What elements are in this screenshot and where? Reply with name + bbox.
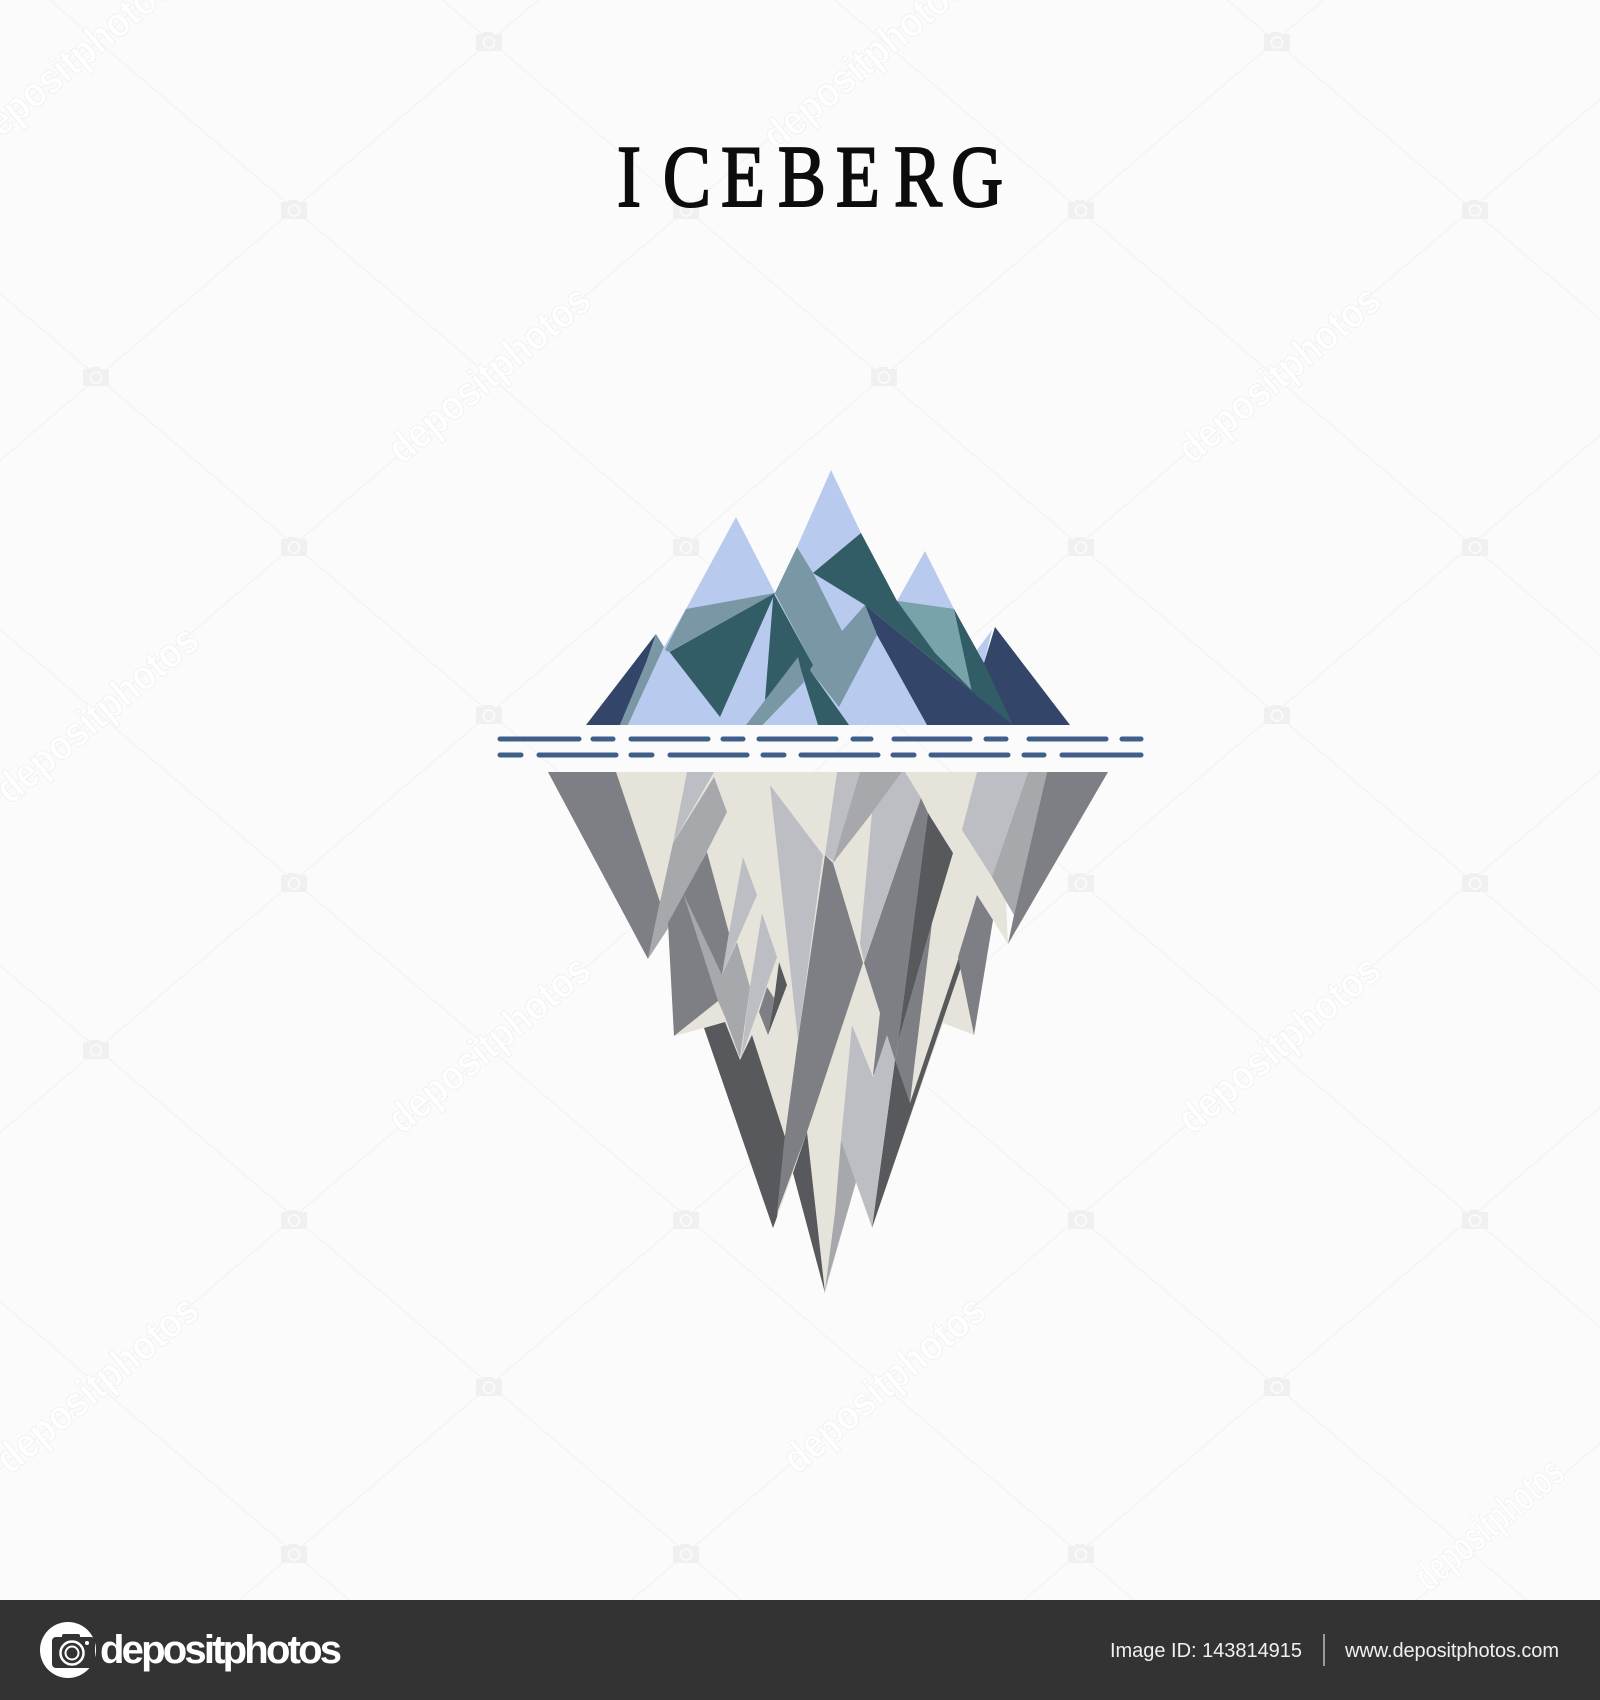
iceberg above water bbox=[586, 470, 1070, 725]
watermark text and camera marks: depositphotos bbox=[773, 1286, 995, 1482]
central dark teal face bbox=[765, 593, 849, 725]
watermark text and camera marks: depositphotos bbox=[1168, 946, 1390, 1142]
lower dark face bbox=[704, 1022, 787, 1228]
right mid grey face bbox=[992, 772, 1047, 915]
central dark grey face bbox=[777, 855, 863, 1213]
website url: www.depositphotos.com bbox=[1344, 1640, 1559, 1662]
right-centre grey strip bbox=[895, 923, 932, 1103]
right dark teal band bbox=[813, 533, 1013, 725]
water line dashes bbox=[500, 739, 1141, 755]
watermark text and camera marks: depositphotos bbox=[378, 946, 600, 1142]
cream ice body bbox=[616, 772, 1008, 1293]
right lower grey shard bbox=[958, 895, 993, 1035]
right light grey face bbox=[962, 772, 1028, 877]
small dark diamonds bbox=[759, 962, 787, 1035]
small light shards bbox=[722, 857, 777, 1058]
right lower dark strip bbox=[872, 957, 961, 1228]
icon: camera badge bbox=[40, 1622, 96, 1678]
left outer grey face bbox=[548, 772, 660, 959]
right-centre dark face bbox=[898, 813, 953, 1042]
footer separator bbox=[1323, 1634, 1325, 1666]
central lower grey-blue strip bbox=[746, 657, 804, 725]
right navy faces bbox=[865, 605, 1070, 725]
left inner dark grey face bbox=[668, 852, 729, 1036]
lower mid grey spike bbox=[825, 1140, 856, 1290]
left peak grey-blue face bbox=[665, 593, 775, 652]
right-centre grey face bbox=[864, 798, 928, 1075]
left mid grey shard bbox=[648, 777, 727, 959]
iceberg below water bbox=[548, 772, 1108, 1293]
light blue ice body bbox=[628, 470, 927, 725]
upper centre shards bbox=[825, 772, 921, 962]
central light grey shard bbox=[770, 785, 823, 1040]
central grey-blue ridge bbox=[775, 547, 877, 707]
depositphotos logo bbox=[40, 1622, 342, 1678]
right outer dark grey face bbox=[1008, 772, 1108, 944]
right light teal face bbox=[897, 601, 972, 690]
title: ICEBERG bbox=[617, 128, 1003, 226]
logo wordmark: depositphotos bbox=[100, 1628, 342, 1672]
footer bar bbox=[0, 1600, 1600, 1700]
watermark text and camera marks: depositphotos bbox=[378, 276, 600, 472]
left navy peak bbox=[586, 634, 664, 725]
lower central dark sliver bbox=[793, 1132, 825, 1293]
left peak dark teal face bbox=[670, 593, 775, 717]
image id: Image ID: 143814915 bbox=[1110, 1640, 1302, 1662]
lower light grey spike bbox=[841, 1025, 895, 1227]
right small light peak bbox=[897, 551, 992, 663]
left mid grey strip bbox=[683, 893, 750, 1058]
watermark text and camera marks: depositphotos bbox=[1168, 276, 1390, 472]
left light grey shard bbox=[673, 772, 714, 843]
